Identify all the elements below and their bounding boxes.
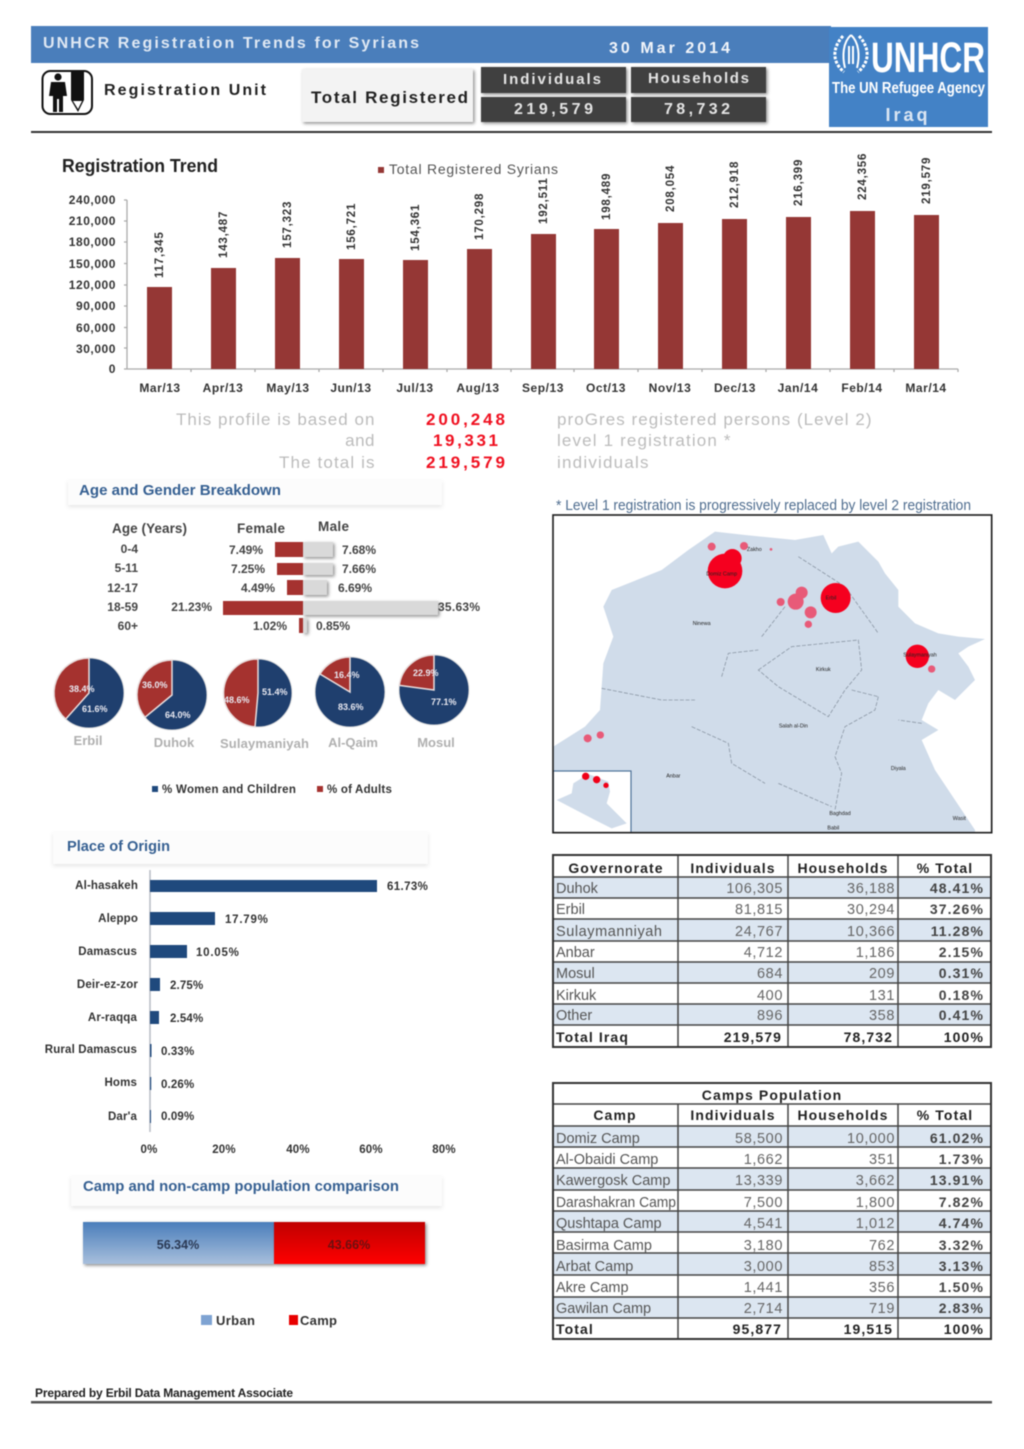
stacked bar: camp vs urban: 56.34% — [157, 1238, 199, 1252]
title: UNHCR Registration Trends for Syrians — [43, 35, 419, 52]
profile summary text: This profile is based on — [176, 410, 375, 429]
grid lines — [553, 1104, 991, 1339]
map border — [553, 515, 992, 833]
row: Duhok — [556, 880, 984, 897]
row: Kirkuk: 400 — [757, 988, 783, 1004]
pie: Al-Qaim: Al-Qaim — [328, 735, 378, 750]
row: Anbar: 2.15% — [939, 944, 984, 960]
pie legend — [152, 784, 392, 796]
y axis labels: 150,000 — [69, 257, 116, 271]
origin labels: Damascus — [78, 946, 137, 958]
row: Al-Obaidi — [556, 1151, 984, 1168]
x axis labels: Apr/13 — [203, 381, 243, 395]
row: Qushtapa: 1,012 — [856, 1216, 895, 1232]
origin values — [161, 881, 428, 1123]
row: Duhok: 48.41% — [930, 880, 984, 896]
footer credit: Prepared by Erbil Data Management Associate — [35, 1386, 293, 1400]
row: Kawergosk: 13,339 — [735, 1173, 783, 1189]
bar chart: place of origin — [45, 870, 456, 1156]
row: Kawergosk — [556, 1172, 984, 1189]
individuals value — [481, 97, 626, 122]
profile summary text — [176, 410, 872, 472]
bar value labels: 170,298 — [474, 193, 486, 240]
agency tagline: The UN Refugee Agency — [832, 80, 985, 97]
row: Erbil: 30,294 — [847, 902, 895, 918]
y axis labels: 60,000 — [76, 321, 116, 335]
pie: Mosul — [399, 655, 469, 750]
row: Al-Obaidi: 1,662 — [744, 1152, 783, 1168]
y axis labels: 180,000 — [69, 235, 116, 249]
profile summary text: individuals — [557, 453, 649, 472]
profile summary text: 19,331 — [433, 431, 498, 450]
UNHCR logo block — [829, 27, 988, 127]
pie: Duhok: 36.0% — [142, 680, 168, 690]
row: Gawilan: 719 — [869, 1301, 895, 1317]
pie: Erbil: 38.4% — [69, 684, 95, 694]
stacked bar: camp vs urban: 43.66% — [328, 1238, 370, 1252]
pie: Al-Qaim: 16.4% — [334, 670, 360, 680]
y axis labels: 90,000 — [76, 299, 116, 313]
male bars — [303, 542, 438, 633]
row: Akre: 1.50% — [939, 1279, 984, 1295]
pie: Sulaymaniyah: 48.6% — [224, 695, 250, 705]
households value: 78,732 — [664, 101, 730, 118]
heading: camp comparison — [71, 1176, 442, 1206]
bar value labels: 117,345 — [154, 231, 166, 278]
row: Sulaymanniyah: 11.28% — [931, 923, 984, 939]
row: Mosul: 684 — [757, 966, 783, 982]
profile summary text: The total is — [279, 453, 375, 472]
row: Other: 0.41% — [939, 1007, 984, 1023]
row: total: Total — [556, 1321, 594, 1337]
bar value labels: 154,361 — [410, 204, 422, 251]
map place labels: Sulaymaniyah — [903, 653, 937, 659]
row: Al-Obaidi: 351 — [869, 1152, 895, 1168]
x axis labels: Mar/14 — [905, 381, 947, 395]
row shading — [553, 1126, 991, 1318]
x axis labels: Jul/13 — [396, 381, 434, 395]
age labels: 0-4 — [121, 542, 138, 556]
female values: 4.49% — [241, 581, 275, 595]
map place labels: Zakho — [747, 547, 762, 553]
row: Qushtapa: Qushtapa Camp — [556, 1216, 662, 1232]
female values: 1.02% — [253, 619, 287, 633]
profile summary text: proGres registered persons (Level 2) — [557, 410, 872, 429]
total registered box — [302, 69, 473, 122]
column headings: Female — [237, 521, 285, 536]
origin labels: Ar-raqqa — [88, 1012, 137, 1024]
row: Domiz: Domiz Camp — [556, 1131, 640, 1147]
row: Other: 896 — [757, 1008, 783, 1024]
pie: Erbil — [54, 658, 124, 748]
bar value labels: 157,323 — [282, 201, 294, 248]
row: Erbil: 81,815 — [735, 902, 783, 918]
table header — [568, 860, 973, 876]
row: Domiz: 58,500 — [735, 1131, 783, 1147]
icon: UNHCR laurel and hands — [835, 35, 867, 72]
row: Darashakran: 7.82% — [939, 1194, 984, 1210]
y axis labels: 0 — [109, 362, 116, 376]
heading: place of origin — [53, 832, 428, 864]
table header: Households — [797, 860, 889, 876]
row: Sulaymanniyah — [556, 923, 984, 940]
map place labels: Diyala — [891, 766, 906, 772]
origin values: 0.09% — [161, 1111, 194, 1123]
individuals header: Individuals — [503, 71, 601, 88]
row shading — [553, 877, 991, 1025]
y axis labels: 240,000 — [69, 193, 116, 207]
row: Anbar: Anbar — [556, 945, 595, 961]
map place labels: Salah al-Din — [779, 724, 808, 730]
row: total: 100% — [944, 1029, 984, 1045]
chart legend: Total Registered Syrians — [389, 161, 558, 177]
row: Al-Obaidi: Al-Obaidi Camp — [556, 1152, 658, 1168]
stacked bar legend: Camp — [300, 1313, 337, 1328]
heading: place of origin: Place of Origin — [67, 838, 170, 855]
table header: Individuals — [690, 860, 776, 876]
map: Iraq region — [553, 532, 985, 833]
x axis labels: Aug/13 — [456, 381, 500, 395]
row: Anbar — [556, 944, 984, 961]
female values: 21.23% — [171, 600, 212, 614]
bar value labels: 192,511 — [538, 177, 550, 224]
map place labels: Domiz Camp — [706, 571, 737, 577]
pie: Sulaymaniyah: Sulaymaniyah — [220, 736, 309, 751]
origin values: 17.79% — [225, 914, 268, 926]
households header — [631, 67, 766, 93]
age labels: 5-11 — [115, 561, 138, 575]
pie: Erbil: Erbil — [74, 733, 102, 748]
heading: age and gender breakdown — [68, 480, 442, 505]
icon: registration unit — [42, 71, 92, 114]
row: total: 100% — [944, 1321, 984, 1337]
row: Akre: Akre Camp — [556, 1280, 629, 1296]
map bubbles: secondary sites — [584, 542, 935, 742]
row: Basirma: 3,180 — [744, 1238, 783, 1254]
row: Domiz: 10,000 — [847, 1131, 895, 1147]
row: Basirma: 3.32% — [939, 1237, 984, 1253]
bar value labels: 224,356 — [857, 153, 869, 200]
female values — [171, 543, 287, 633]
origin values: 0.26% — [161, 1079, 194, 1091]
row: Anbar: 1,186 — [856, 945, 895, 961]
bar chart: registration trend — [69, 153, 958, 395]
row: Mosul: 0.31% — [939, 965, 984, 981]
pie: Al-Qaim — [315, 657, 385, 750]
column headings: Male — [318, 519, 349, 534]
row: Kirkuk: 131 — [869, 988, 895, 1004]
age pyramid chart — [107, 519, 480, 633]
female values: 7.49% — [229, 543, 263, 557]
pie: Sulaymaniyah — [220, 659, 309, 751]
row: Duhok: Duhok — [556, 881, 599, 897]
row: Mosul: 209 — [869, 966, 895, 982]
chart heading: registration trend: Registration Trend — [62, 156, 218, 176]
male values: 6.69% — [338, 581, 372, 595]
row: Mosul: Mosul — [556, 966, 595, 982]
row: Darashakran — [556, 1194, 984, 1211]
age labels — [107, 542, 138, 633]
row: total — [556, 1321, 984, 1337]
row: Akre: 1,441 — [744, 1280, 783, 1296]
map place labels: Baghdad — [829, 811, 851, 817]
table header: Governorate — [568, 860, 664, 876]
row: Qushtapa: 4.74% — [939, 1215, 984, 1231]
percent axis: 80% — [432, 1144, 456, 1156]
row: Basirma: 762 — [869, 1238, 895, 1254]
male values: 7.68% — [342, 543, 376, 557]
row: Basirma — [556, 1237, 984, 1254]
pie: Sulaymaniyah: 51.4% — [262, 687, 288, 697]
row: Akre: 356 — [869, 1280, 895, 1296]
map place labels: Anbar — [666, 774, 681, 780]
row: Erbil: 37.26% — [930, 901, 984, 917]
row: Darashakran: 7,500 — [744, 1195, 783, 1211]
origin labels: Dar'a — [108, 1111, 137, 1123]
row: Darashakran: Darashakran Camp — [556, 1195, 676, 1211]
row: Darashakran: 1,800 — [856, 1195, 895, 1211]
pie legend: % Women and Children — [162, 784, 296, 796]
y axis labels — [69, 193, 116, 376]
row: Arbat: 3.13% — [939, 1258, 984, 1274]
y axis labels: 30,000 — [76, 342, 116, 356]
female bars — [223, 542, 303, 633]
row: Other: Other — [556, 1008, 592, 1024]
bar value labels: 219,579 — [921, 157, 933, 204]
origin values: 61.73% — [387, 881, 428, 893]
origin labels: Al-hasakeh — [75, 880, 138, 892]
row: Sulaymanniyah: 24,767 — [735, 924, 783, 940]
row: Basirma: Basirma Camp — [556, 1238, 652, 1254]
age labels: 12-17 — [107, 581, 138, 595]
total registered box: Total Registered — [311, 88, 468, 107]
profile summary text: and — [345, 431, 375, 450]
pie legend: % of Adults — [327, 784, 392, 796]
bar value labels: 212,918 — [729, 161, 741, 208]
row: Kawergosk: 3,662 — [856, 1173, 895, 1189]
map frame — [553, 515, 992, 833]
pie: Duhok: Duhok — [154, 735, 195, 750]
row: Kawergosk: 13.91% — [930, 1172, 984, 1188]
row: Domiz: 61.02% — [930, 1130, 984, 1146]
grid lines — [553, 855, 991, 1047]
row: Gawilan: 2.83% — [939, 1300, 984, 1316]
table header: Households — [797, 1107, 889, 1123]
row: Arbat: 3,000 — [744, 1259, 783, 1275]
map place labels — [666, 547, 966, 831]
row: Sulaymanniyah: Sulaymanniyah — [556, 924, 662, 940]
origin values: 2.75% — [170, 980, 203, 992]
x axis labels: Mar/13 — [139, 381, 181, 395]
pie: Duhok: 64.0% — [165, 710, 191, 720]
male values: 0.85% — [316, 619, 350, 633]
households value — [631, 97, 766, 122]
heading: camp comparison: Camp and non-camp population comparison — [83, 1178, 399, 1195]
registration unit label: Registration Unit — [104, 82, 267, 99]
origin bars — [150, 880, 377, 1123]
percent axis: 40% — [286, 1144, 310, 1156]
percent axis: 0% — [141, 1144, 157, 1156]
map place labels: Erbil — [826, 595, 836, 601]
row: total: 78,732 — [844, 1029, 893, 1045]
stacked bar: camp vs urban — [83, 1222, 425, 1264]
pie: Mosul: 22.9% — [413, 668, 439, 678]
origin labels — [45, 880, 138, 1123]
origin values: 0.33% — [161, 1046, 194, 1058]
origin labels: Aleppo — [98, 913, 138, 925]
row: Domiz — [556, 1130, 984, 1147]
map inset — [553, 771, 631, 833]
row: total: 95,877 — [733, 1321, 782, 1337]
age labels: 60+ — [118, 619, 138, 633]
y axis labels: 210,000 — [69, 214, 116, 228]
header banner — [31, 26, 831, 63]
table header: Individuals — [690, 1107, 776, 1123]
table title: Camps Population — [702, 1087, 842, 1103]
row: Erbil: Erbil — [556, 902, 585, 918]
male values: 35.63% — [438, 600, 480, 614]
bar value labels — [154, 153, 933, 278]
origin values: 10.05% — [196, 947, 239, 959]
percent axis — [141, 1144, 456, 1156]
origin values: 2.54% — [170, 1013, 203, 1025]
x axis labels: May/13 — [266, 381, 310, 395]
row: Al-Obaidi: 1.73% — [939, 1151, 984, 1167]
row: total: 219,579 — [724, 1029, 782, 1045]
report date: 30 Mar 2014 — [609, 40, 730, 57]
row: Kirkuk — [556, 987, 984, 1004]
table header: % Total — [917, 1107, 973, 1123]
row: total: Total Iraq — [556, 1029, 629, 1045]
profile summary text: 219,579 — [426, 453, 505, 472]
bar value labels: 198,489 — [601, 173, 613, 220]
pie: Duhok — [137, 660, 207, 750]
origin labels: Deir-ez-zor — [77, 979, 138, 991]
column headings — [112, 519, 349, 536]
table header — [593, 1107, 973, 1123]
individuals header — [481, 67, 626, 93]
row: Kirkuk: Kirkuk — [556, 988, 597, 1004]
country label: Iraq — [885, 105, 931, 125]
bar value labels: 156,721 — [346, 203, 358, 250]
row: Duhok: 106,305 — [726, 881, 783, 897]
stacked bar legend — [201, 1313, 337, 1328]
map place labels: Ninewa — [693, 621, 711, 627]
row: Gawilan — [556, 1300, 984, 1317]
table: camps population — [553, 1083, 991, 1339]
table header: % Total — [917, 860, 973, 876]
row: Gawilan: 2,714 — [744, 1301, 783, 1317]
map place labels: Kirkuk — [816, 667, 831, 673]
origin labels: Homs — [104, 1077, 137, 1089]
bars — [147, 211, 939, 369]
percent axis: 60% — [359, 1144, 383, 1156]
x axis labels: Oct/13 — [586, 381, 626, 395]
pie: Al-Qaim: 83.6% — [338, 702, 364, 712]
profile summary text: level 1 registration * — [557, 431, 731, 450]
map panel — [551, 513, 994, 834]
pie: Erbil: 61.6% — [82, 704, 108, 714]
row: Gawilan: Gawilan Camp — [556, 1301, 651, 1317]
row: Kawergosk: Kawergosk Camp — [556, 1173, 670, 1189]
individuals value: 219,579 — [514, 101, 593, 118]
row: Arbat: 853 — [869, 1259, 895, 1275]
map place labels: Wasit — [953, 816, 966, 822]
male values — [316, 543, 480, 633]
x axis labels: Nov/13 — [649, 381, 691, 395]
male values: 7.66% — [342, 562, 376, 576]
x axis labels: Dec/13 — [714, 381, 756, 395]
profile summary text: 200,248 — [426, 410, 505, 429]
table header: Camp — [593, 1107, 637, 1123]
row: Other: 358 — [869, 1008, 895, 1024]
row: Erbil — [556, 901, 984, 918]
y axis labels: 120,000 — [69, 278, 116, 292]
female values: 7.25% — [231, 562, 265, 576]
table: governorates — [553, 855, 991, 1047]
pie: Mosul: 77.1% — [431, 697, 457, 707]
row: Duhok: 36,188 — [847, 881, 895, 897]
row: Anbar: 4,712 — [744, 945, 783, 961]
row: total: 19,515 — [844, 1321, 893, 1337]
origin labels: Rural Damascus — [45, 1044, 137, 1056]
map bubbles: main sites — [708, 549, 929, 668]
row: Qushtapa — [556, 1215, 984, 1232]
row: Other — [556, 1007, 984, 1024]
x axis labels: Jun/13 — [330, 381, 372, 395]
bar value labels: 143,487 — [218, 211, 230, 258]
agency wordmark: UNHCR — [871, 34, 985, 82]
percent axis: 20% — [212, 1144, 236, 1156]
row: Sulaymanniyah: 10,366 — [847, 924, 895, 940]
pie: Mosul: Mosul — [417, 735, 455, 750]
row: Qushtapa: 4,541 — [744, 1216, 783, 1232]
row: Arbat — [556, 1258, 984, 1275]
x axis labels: Jan/14 — [778, 381, 818, 395]
heading: age and gender breakdown: Age and Gender Breakdown — [79, 482, 281, 499]
age labels: 18-59 — [107, 600, 138, 614]
x axis labels — [139, 381, 947, 395]
column headings: Age (Years) — [112, 521, 187, 536]
stacked bar legend: Urban — [216, 1313, 255, 1328]
row: total — [556, 1029, 984, 1045]
footnote: * Level 1 registration is progressively replaced by level 2 registration — [556, 498, 971, 514]
row: Arbat: Arbat Camp — [556, 1259, 633, 1275]
map place labels: Babil — [827, 825, 839, 831]
x axis labels: Feb/14 — [841, 381, 883, 395]
row: Akre — [556, 1279, 984, 1296]
x axis labels: Sep/13 — [522, 381, 564, 395]
bar value labels: 216,399 — [793, 159, 805, 206]
bar value labels: 208,054 — [665, 165, 677, 212]
row: Kirkuk: 0.18% — [939, 987, 984, 1003]
households header: Households — [648, 70, 749, 87]
row: Mosul — [556, 965, 984, 982]
